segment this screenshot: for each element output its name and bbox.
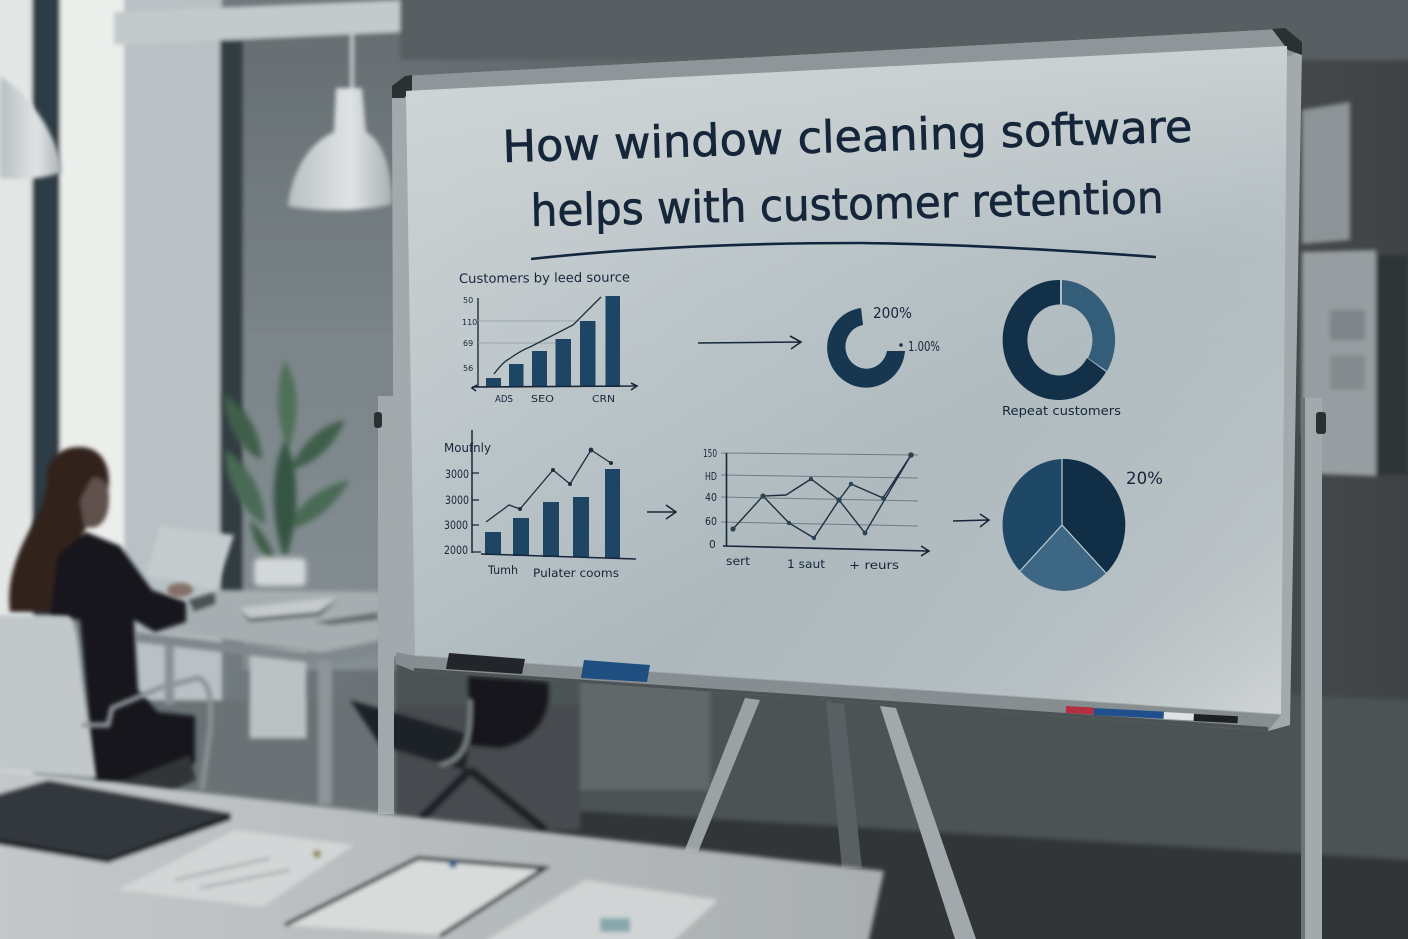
dark folder (0, 780, 231, 858)
side wall (243, 30, 398, 670)
series (733, 455, 911, 533)
caption: Repeat customers (1002, 403, 1121, 418)
window left pane (0, 0, 33, 785)
right wall poster lower (1302, 250, 1376, 476)
y labels: 110 (462, 318, 477, 327)
arrow (953, 514, 989, 527)
grid (721, 453, 918, 526)
chart title: Customers by leed source (459, 271, 630, 287)
x labels: ADS (495, 394, 513, 405)
x labels: sert (726, 554, 751, 568)
y labels: 69 (463, 339, 473, 348)
y labels (462, 296, 477, 373)
hair (9, 447, 109, 612)
dark column strip (220, 40, 244, 600)
chart: line chart (703, 448, 929, 572)
title: How window cleaning software (502, 102, 1193, 173)
chart: customers by lead source: CRN (592, 394, 615, 405)
markers (1066, 706, 1238, 723)
eraser blue (581, 660, 650, 682)
right wall poster upper (1302, 102, 1350, 244)
whiteboard (392, 28, 1302, 731)
black chair behind board (350, 676, 549, 830)
top wall right (400, 0, 1408, 60)
clipboard (285, 858, 545, 935)
easel left post (374, 396, 394, 814)
chart: customers by lead source (459, 271, 637, 405)
tray (396, 652, 1281, 731)
board frame (392, 29, 1302, 731)
window right pane (60, 0, 126, 595)
wall below board (395, 660, 1408, 860)
donut chart: 200%: 1.00% (908, 340, 940, 355)
trend line (494, 297, 601, 374)
foreground desk (0, 769, 884, 939)
chart: customers by lead source: SEO (531, 394, 554, 405)
floor right (395, 800, 1408, 939)
y labels (444, 467, 469, 557)
body (50, 532, 195, 782)
chart: monthly: Pulater cooms (533, 566, 619, 580)
trend line (486, 450, 611, 522)
easel legs (684, 698, 976, 939)
y labels: 3000 (445, 493, 469, 507)
y labels: 50 (463, 296, 473, 305)
y labels: 3000 (444, 518, 468, 532)
ceiling beam (114, 0, 400, 45)
y labels: 56 (463, 364, 473, 373)
bars (486, 296, 620, 387)
window frame (32, 0, 60, 615)
y labels (703, 448, 717, 551)
floor left (120, 700, 395, 810)
pendant lamp left (0, 76, 62, 179)
office chair (0, 615, 211, 792)
paper front (480, 880, 718, 939)
hand (167, 583, 193, 597)
donut chart: 200%: 200% (873, 304, 912, 322)
chart: monthly (444, 430, 636, 580)
corner top right (1272, 28, 1302, 55)
pedestal (250, 650, 306, 738)
corner top left (392, 75, 412, 98)
bars (485, 469, 620, 558)
desk leg (318, 660, 332, 805)
title underline (531, 243, 1156, 259)
column (124, 0, 222, 715)
plant (223, 360, 350, 586)
donut chart: 200% (827, 304, 940, 388)
y labels: 150 (703, 448, 717, 460)
paper (117, 830, 354, 907)
title (502, 102, 1193, 237)
chart: line chart: + reurs (849, 558, 899, 572)
woman at desk (9, 447, 195, 782)
easel right post (1301, 398, 1326, 939)
y labels: 60 (705, 516, 717, 528)
arrow (698, 336, 801, 349)
x labels: Tumh (487, 563, 518, 577)
y labels: 40 (705, 492, 717, 504)
pie chart: 20%: 20% (1126, 469, 1163, 489)
axis (472, 383, 637, 391)
pie chart: 20% (1003, 459, 1163, 591)
arrow (647, 505, 676, 519)
back desk with laptop (136, 526, 380, 805)
title: helps with customer retention (530, 173, 1164, 237)
eraser black (446, 653, 525, 674)
y labels: 0 (709, 539, 716, 551)
laptop (146, 526, 234, 590)
y labels: 3000 (445, 467, 469, 481)
y labels: 2000 (444, 543, 468, 557)
face (80, 478, 109, 528)
chart: line chart: 1 saut (787, 557, 826, 571)
y labels: HD (705, 471, 717, 483)
pendant lamp centre (288, 30, 392, 210)
board surface (406, 46, 1287, 714)
chart: monthly: Moufnly (444, 441, 491, 455)
tablet on desk (240, 597, 336, 618)
donut chart: repeat customers (1002, 280, 1121, 418)
